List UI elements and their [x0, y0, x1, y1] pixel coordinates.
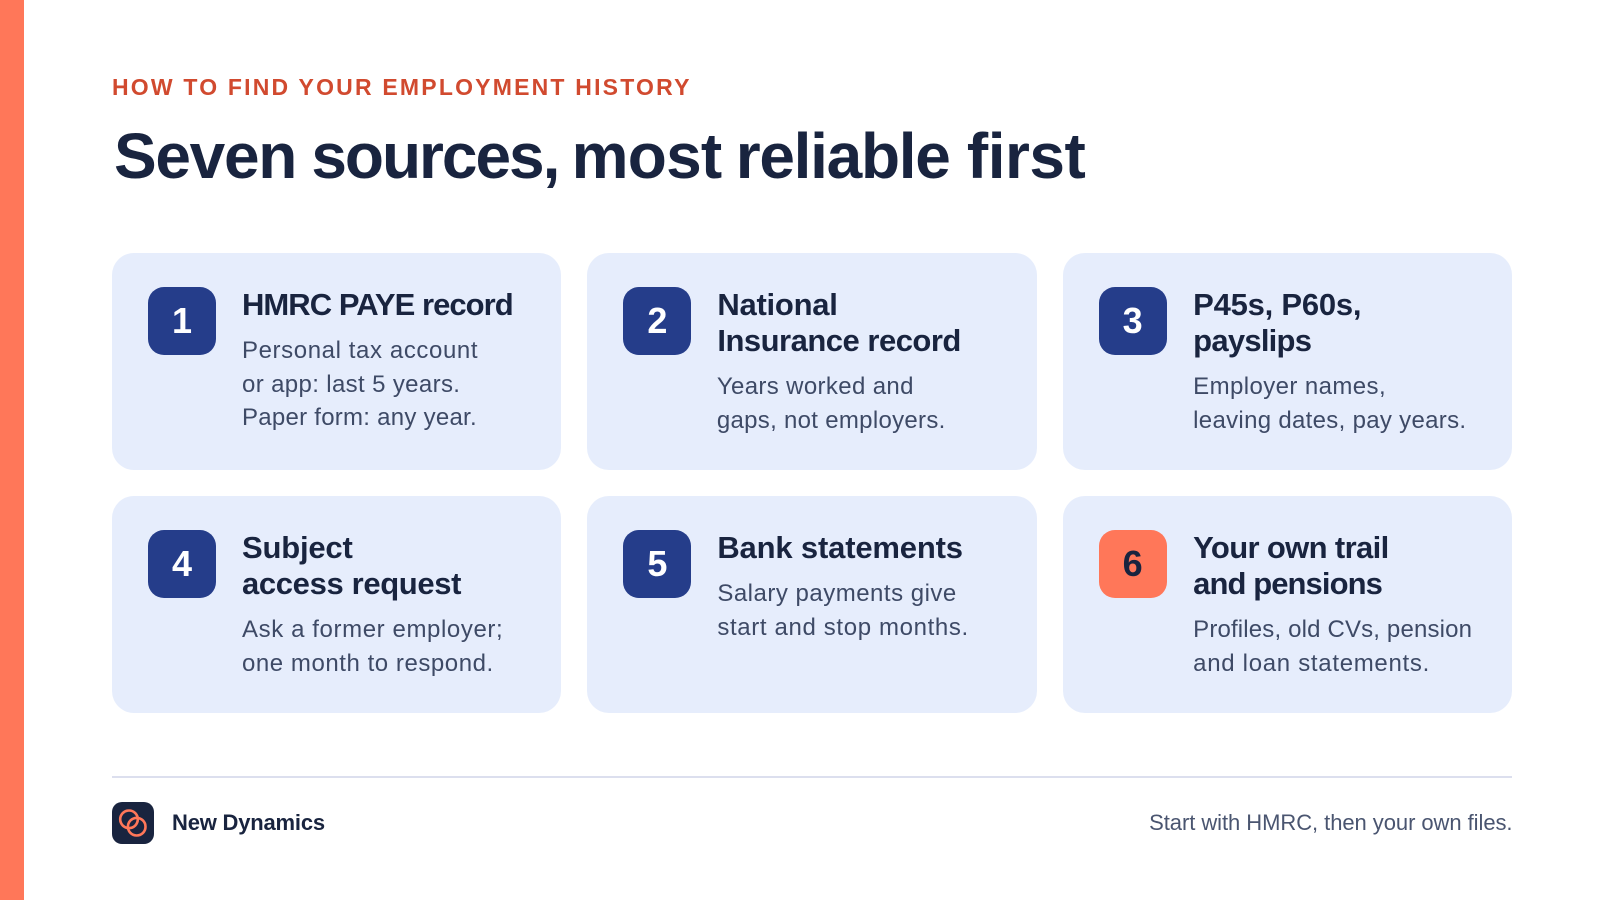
description: [717, 580, 969, 641]
panel: Your own trail and pensions: [1063, 496, 1512, 713]
description: Years worked and: [717, 373, 914, 400]
description: Personal tax account: [242, 337, 478, 364]
description: [1193, 373, 1466, 434]
heading: [717, 287, 961, 358]
heading: HMRC PAYE record: [242, 287, 513, 322]
footer divider: [112, 776, 1512, 778]
panel: HMRC PAYE record: [112, 253, 561, 470]
accent stripe: [0, 0, 24, 900]
description: one month to respond.: [242, 650, 494, 677]
badge 4: [148, 530, 216, 598]
description: [242, 616, 503, 677]
badge 6: [1099, 530, 1167, 598]
badge 4: 4: [172, 543, 192, 584]
description: gaps, not employers.: [717, 407, 946, 434]
heading: [1193, 287, 1361, 358]
panel: Bank statements: [587, 496, 1037, 713]
description: and loan statements.: [1193, 650, 1430, 677]
badge 3: 3: [1123, 300, 1143, 341]
heading: and pensions: [1193, 566, 1382, 601]
description: Paper form: any year.: [242, 404, 477, 431]
title: Seven sources, most reliable first: [114, 120, 1085, 192]
badge 1: [148, 287, 216, 355]
heading: payslips: [1193, 323, 1311, 358]
heading: National: [717, 287, 838, 322]
description: leaving dates, pay years.: [1193, 407, 1466, 434]
heading: Your own trail: [1193, 530, 1389, 565]
heading: [1193, 530, 1389, 601]
heading: P45s, P60s,: [1193, 287, 1361, 322]
description: Ask a former employer;: [242, 616, 503, 643]
description: or app: last 5 years.: [242, 371, 460, 398]
badge 1: 1: [172, 300, 192, 341]
badge 6: 6: [1123, 543, 1143, 584]
badge 3: [1099, 287, 1167, 355]
heading: [242, 530, 462, 601]
badge 5: 5: [647, 543, 667, 584]
icon: New Dynamics logo: [112, 802, 154, 844]
panel: National Insurance record: [587, 253, 1037, 470]
heading: Insurance record: [717, 323, 961, 358]
description: Salary payments give: [717, 580, 957, 607]
brand name: New Dynamics: [172, 810, 325, 835]
description: [242, 337, 478, 431]
panel: Subject access request: [112, 496, 561, 713]
description: start and stop months.: [717, 614, 969, 641]
badge 5: [623, 530, 691, 598]
eyebrow: HOW TO FIND YOUR EMPLOYMENT HISTORY: [112, 74, 692, 100]
heading: Subject: [242, 530, 353, 565]
heading: access request: [242, 566, 461, 601]
description: [1193, 616, 1472, 677]
description: Profiles, old CVs, pension: [1193, 616, 1472, 643]
heading: Bank statements: [717, 530, 963, 565]
footer note: Start with HMRC, then your own files.: [1149, 810, 1512, 835]
description: [717, 373, 946, 434]
description: Employer names,: [1193, 373, 1386, 400]
badge 2: 2: [647, 300, 667, 341]
badge 2: [623, 287, 691, 355]
panel: P45s, P60s, payslips: [1063, 253, 1512, 470]
